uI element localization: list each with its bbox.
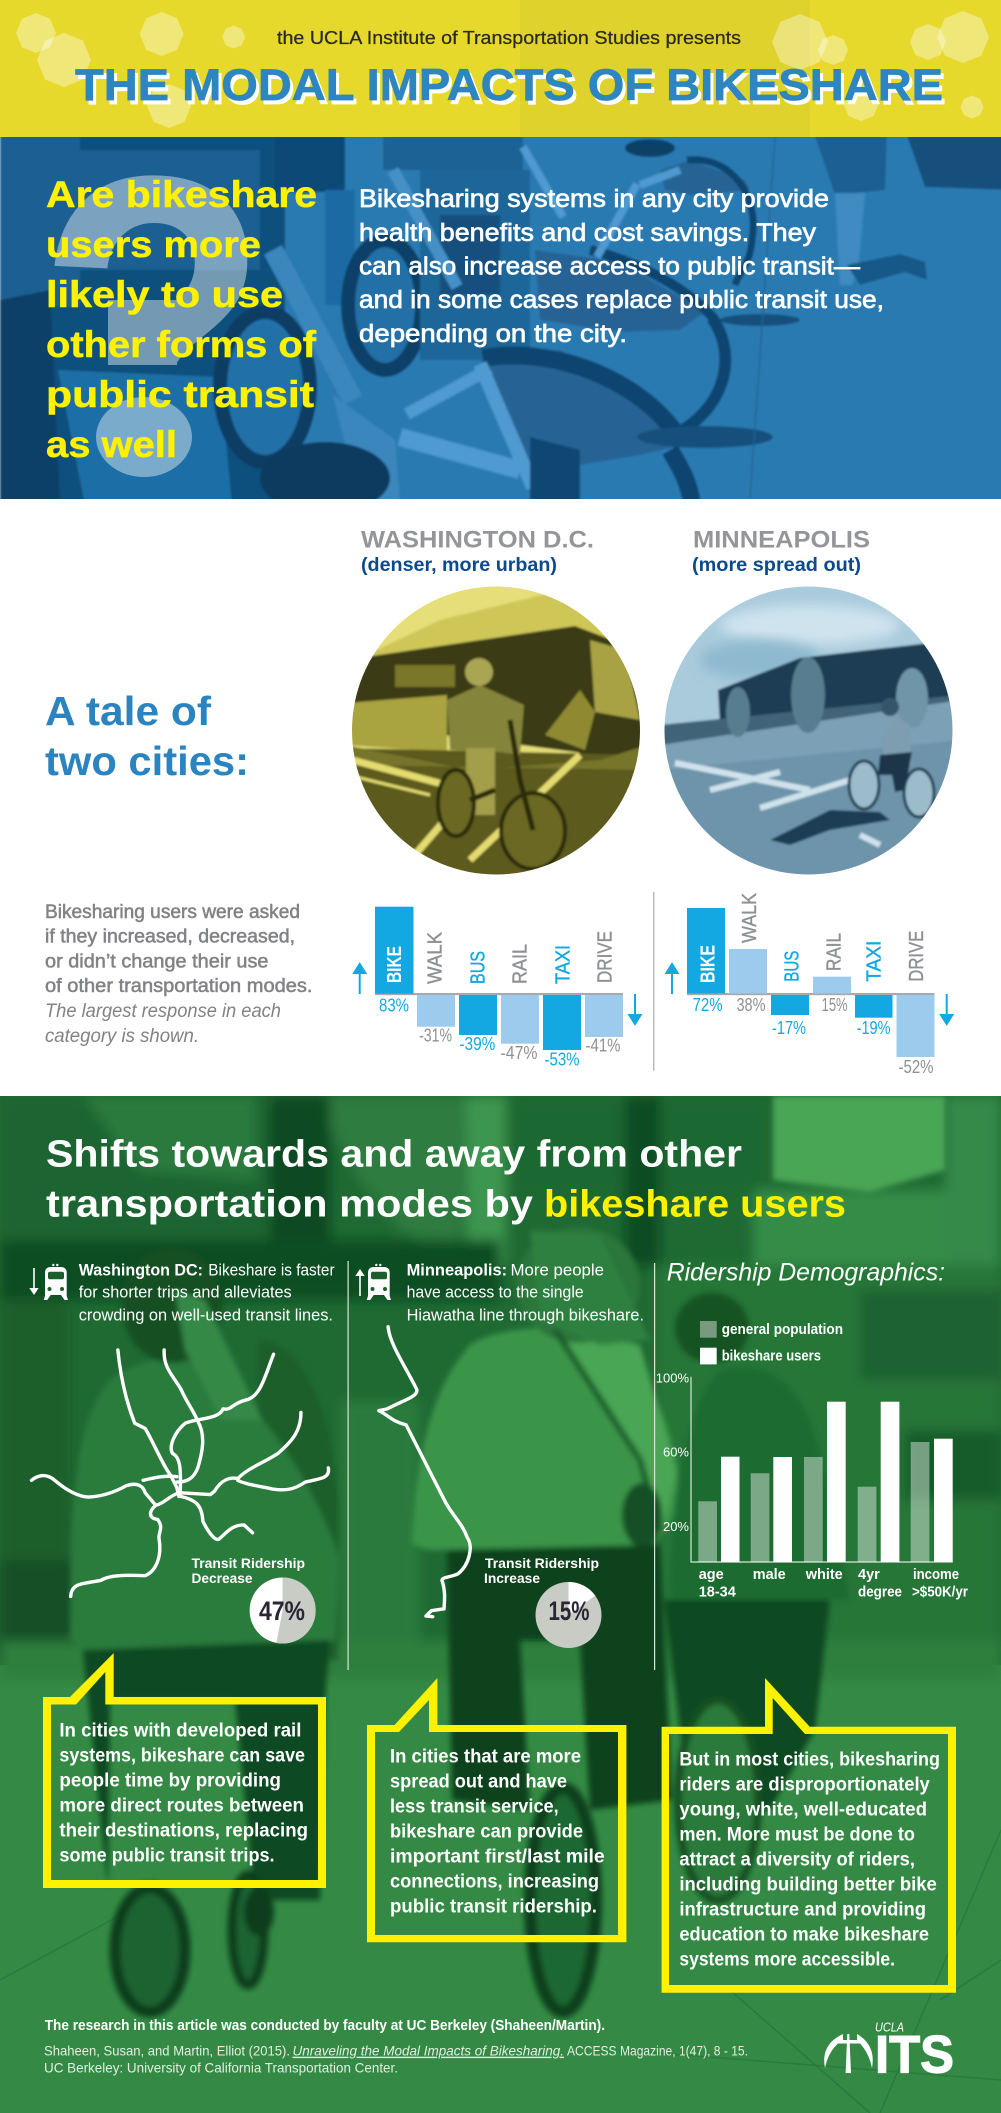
bar: walk -31% <box>417 931 455 1046</box>
bar: rail -47% <box>500 944 539 1063</box>
chart divider <box>653 892 654 1071</box>
callout: spread out cities: spread out and have <box>390 1772 567 1793</box>
section heading: Shifts towards and away from other <box>46 1134 742 1176</box>
logo: UCLA ITS <box>824 2022 953 2074</box>
bar: taxi -53%: TAXI <box>552 945 574 984</box>
bar: bike 83% <box>375 907 414 1016</box>
intro paragraph <box>359 185 884 348</box>
question heading <box>46 174 317 465</box>
bar: bike 83%: BIKE <box>384 946 406 983</box>
bar: drive -41%: -41% <box>586 1036 620 1056</box>
callout: demographics <box>662 1678 956 1993</box>
bar chart: ridership demographics: 4yr <box>858 1567 880 1583</box>
footer credits: UC Berkeley: University of California Transportation Center. <box>44 2060 398 2076</box>
city heading: Minneapolis <box>692 526 870 576</box>
label: transit ridership decrease <box>192 1558 304 1583</box>
survey description: Bikesharing users were asked <box>45 902 300 923</box>
heading: a tale of two cities <box>45 688 249 784</box>
callout: spread out cities <box>367 1678 626 1942</box>
text: Minneapolis: Minneapolis: <box>407 1261 507 1280</box>
logo: UCLA ITS: UCLA <box>875 2021 904 2035</box>
bar: walk 38% <box>729 892 767 1015</box>
bar: rail 15% <box>813 933 851 1015</box>
section heading: transportation modes by <box>46 1184 533 1226</box>
callout: demographics: including building better bike <box>679 1875 937 1896</box>
icon: train with down arrow <box>29 1264 68 1300</box>
panel: shifts towards and away <box>0 1096 1001 2113</box>
callout: demographics: young, white, well-educated <box>679 1800 927 1821</box>
callout: demographics: infrastructure and providing <box>679 1900 926 1921</box>
survey description: of other transportation modes. <box>45 976 312 997</box>
presenter line: the UCLA Institute of Transportation Studies presents <box>277 28 741 48</box>
label: transit ridership increase: Increase <box>484 1570 540 1586</box>
bar chart: Minneapolis <box>666 892 952 1077</box>
heading: a tale of two cities: two cities: <box>45 738 249 784</box>
map: Washington DC metro lines <box>32 1350 329 1596</box>
callout: demographics: systems more accessible. <box>679 1950 895 1971</box>
city heading: Minneapolis: MINNEAPOLIS <box>693 526 870 554</box>
survey description: category is shown. <box>45 1026 199 1047</box>
survey description: if they increased, decreased, <box>45 926 295 948</box>
arrow: increase <box>354 964 365 994</box>
icon: train with up arrow <box>355 1264 391 1300</box>
callout: spread out cities: bikeshare can provide <box>390 1822 583 1843</box>
bar: bus -17% <box>771 951 809 1038</box>
intro paragraph: can also increase access to public transit— <box>359 252 860 280</box>
map: Hiawatha line <box>379 1327 470 1617</box>
arrow: decrease <box>941 994 952 1024</box>
pie chart: 15% <box>536 1582 602 1648</box>
label: transit ridership decrease: Transit Ridership <box>192 1555 305 1571</box>
heading: ridership demographics: Ridership Demographics: <box>667 1259 945 1287</box>
bar: walk -31%: -31% <box>419 1026 452 1046</box>
callout: developed rail systems: people time by providing <box>59 1771 281 1792</box>
survey description <box>45 902 312 1047</box>
heading: a tale of two cities: A tale of <box>45 688 211 734</box>
bar: walk 38%: 38% <box>736 995 766 1015</box>
bar chart: Washington D.C. <box>354 907 641 1070</box>
pie chart: 15%: 15% <box>548 1596 590 1626</box>
bar: bus -39%: BUS <box>468 951 490 984</box>
text: Washington DC: Bikeshare is faster <box>208 1261 335 1280</box>
bar: drive -41%: DRIVE <box>594 931 616 983</box>
bar: bus -17%: BUS <box>781 951 803 982</box>
panel: a tale of two cities <box>46 530 954 1073</box>
question mark: ? <box>37 87 269 569</box>
bar: bus -17%: -17% <box>772 1018 806 1038</box>
bar: taxi -53%: -53% <box>544 1050 580 1070</box>
callout: demographics: education to make bikeshare <box>679 1925 929 1946</box>
bar: bike 72%: BIKE <box>697 945 719 983</box>
bar: taxi -53% <box>543 945 581 1070</box>
legend: bikeshare users <box>722 1349 821 1365</box>
bar chart: ridership demographics: degree <box>858 1585 902 1601</box>
bar: drive -52% <box>896 931 934 1077</box>
text: Washington DC: crowding on well-used transit lines. <box>79 1306 333 1325</box>
arrow: increase <box>666 964 678 994</box>
text: Minneapolis: have access to the single <box>407 1282 584 1302</box>
footer credits: Unraveling the Modal Impacts of Bikesharing. <box>292 2043 564 2059</box>
photo: street background <box>0 1096 1001 2113</box>
bar chart: ridership demographics: >$50K/yr <box>912 1585 968 1601</box>
bar: drive -41% <box>585 931 623 1056</box>
callout: spread out cities: less transit service, <box>390 1797 559 1818</box>
callout: developed rail systems: some public transit trips. <box>59 1846 275 1867</box>
panel: intro with bike photo <box>0 137 1001 499</box>
pie chart: 47% <box>250 1578 316 1644</box>
label: transit ridership decrease: Decrease <box>192 1570 253 1586</box>
legend: general population <box>722 1322 843 1338</box>
text: Washington DC: Washington DC: <box>79 1261 203 1280</box>
callout: developed rail systems: their destinations, replacing <box>59 1821 308 1842</box>
intro paragraph: depending on the city. <box>359 320 627 348</box>
bar: taxi -19%: TAXI <box>863 941 885 982</box>
arrow: decrease <box>629 994 641 1024</box>
bar: bus -39%: -39% <box>459 1034 495 1054</box>
photo: three cyclists seen from behind <box>70 1227 850 2012</box>
bar chart: ridership demographics: income <box>913 1567 959 1583</box>
photo: Washington cyclist and bus <box>345 580 647 885</box>
bar: rail 15%: RAIL <box>823 933 845 971</box>
footer credits: ACCESS Magazine, 1(47), 8 - 15. <box>567 2043 748 2059</box>
city heading: Washington D.C.: WASHINGTON D.C. <box>361 526 594 554</box>
survey description: or didn’t change their use <box>45 952 268 972</box>
callout: spread out cities: connections, increasing <box>390 1872 599 1893</box>
bar chart: ridership demographics: white <box>805 1567 843 1583</box>
question heading: users more <box>46 224 261 265</box>
callout: developed rail systems: systems, bikeshare can save <box>59 1746 305 1767</box>
callout: demographics: But in most cities, bikesharing <box>679 1750 940 1771</box>
section heading <box>46 1134 846 1226</box>
survey description: The largest response in each <box>45 1001 281 1022</box>
section heading: bikeshare users <box>544 1184 846 1226</box>
label: transit ridership increase: Transit Ridership <box>485 1555 599 1571</box>
bar: drive -52%: DRIVE <box>906 931 928 982</box>
column dividers <box>348 1261 655 1670</box>
bar: rail -47%: RAIL <box>509 944 531 984</box>
city heading: Washington D.C.: (denser, more urban) <box>361 554 557 576</box>
question mark <box>54 175 248 477</box>
logo: UCLA ITS: ITS <box>875 2026 954 2085</box>
text: Minneapolis: Hiawatha line through bikeshare. <box>407 1306 644 1325</box>
bar: walk -31%: WALK <box>425 931 447 984</box>
footer credits: The research in this article was conducted by faculty at UC Berkeley (Shaheen/Martin). <box>45 2018 605 2034</box>
bar: bike 72%: 72% <box>693 995 723 1015</box>
bar chart: ridership demographics: 20% <box>663 1519 689 1534</box>
bar chart: ridership demographics: 100% <box>656 1371 689 1386</box>
city heading: Washington D.C. <box>361 526 594 576</box>
question heading: likely to use <box>46 274 283 315</box>
intro paragraph: health benefits and cost savings. They <box>359 219 817 247</box>
callout: developed rail systems: In cities with developed rail <box>59 1721 301 1742</box>
callout: spread out cities: In cities that are more <box>390 1747 581 1768</box>
city heading: Minneapolis: (more spread out) <box>692 554 861 576</box>
photo: Minneapolis cyclist and stadium <box>664 586 952 874</box>
question heading: public transit <box>46 374 314 415</box>
footer credits <box>44 2018 748 2076</box>
question heading: other forms of <box>46 324 317 365</box>
bar chart: ridership demographics: 60% <box>663 1445 689 1460</box>
bar: drive -52%: -52% <box>898 1057 934 1077</box>
bar: taxi -19% <box>855 941 892 1038</box>
photo: parked bikeshare bikes <box>0 130 1001 514</box>
bar chart: ridership demographics: age <box>699 1567 724 1583</box>
legend <box>700 1321 843 1365</box>
header band <box>0 0 1001 137</box>
bar: taxi -19%: -19% <box>857 1018 891 1038</box>
bar: bike 72% <box>687 908 725 1015</box>
bar chart: ridership demographics: male <box>753 1567 786 1583</box>
bar: bike 83%: 83% <box>379 996 409 1016</box>
label: transit ridership increase <box>484 1558 598 1583</box>
text: Washington DC <box>79 1261 335 1325</box>
callout: developed rail systems: more direct routes between <box>59 1796 304 1817</box>
intro paragraph: and in some cases replace public transit use, <box>359 286 884 314</box>
text: Minneapolis: More people <box>510 1261 604 1280</box>
callout: spread out cities: public transit ridership. <box>390 1897 597 1918</box>
callout: developed rail systems <box>43 1653 326 1888</box>
callout: demographics: men. More must be done to <box>679 1825 915 1846</box>
callout: demographics: attract a diversity of riders, <box>679 1850 915 1871</box>
footer credits: Shaheen, Susan, and Martin, Elliot (2015). <box>44 2043 290 2059</box>
bar: bus -39% <box>459 951 497 1054</box>
main title: THE MODAL IMPACTS OF BIKESHARE <box>78 65 946 114</box>
text: Washington DC: for shorter trips and alleviates <box>79 1282 292 1302</box>
callout: demographics: riders are disproportionately <box>679 1775 930 1796</box>
intro paragraph: Bikesharing systems in any city provide <box>359 185 829 213</box>
question heading: Are bikeshare <box>46 174 317 215</box>
bar: walk 38%: WALK <box>739 892 761 943</box>
bar: rail 15%: 15% <box>822 995 848 1015</box>
pie chart: 47%: 47% <box>259 1596 305 1626</box>
callout: spread out cities: important first/last mile <box>390 1847 605 1868</box>
bar chart: ridership demographics <box>656 1371 968 1601</box>
main title: THE MODAL IMPACTS OF BIKESHARE <box>75 61 943 110</box>
bar: rail -47%: -47% <box>500 1043 538 1063</box>
bar chart: ridership demographics: 18-34 <box>699 1585 736 1601</box>
question heading: as well <box>46 424 177 465</box>
text: Minneapolis <box>407 1261 644 1325</box>
